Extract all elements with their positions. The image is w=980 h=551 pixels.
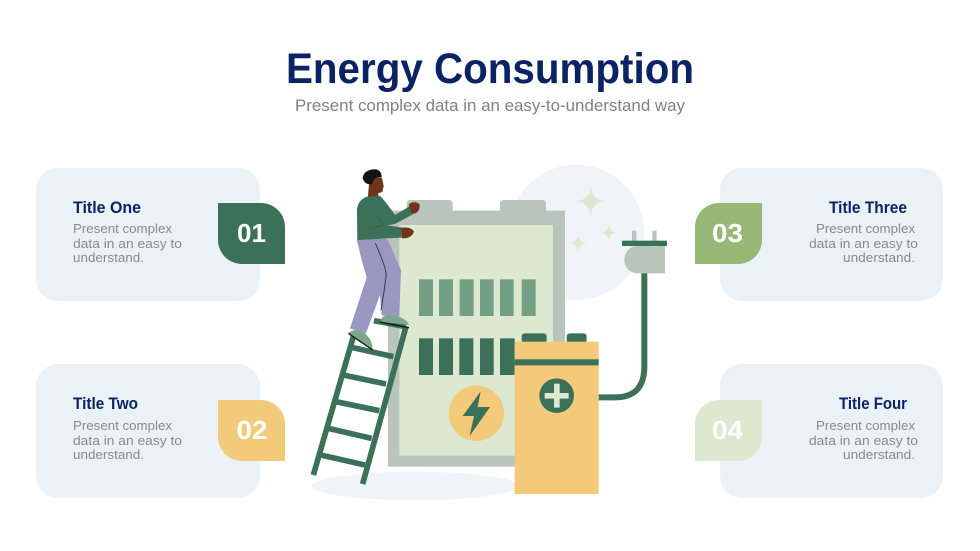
illustration: battery scene <box>312 165 667 500</box>
subtitle: Present complex data in an easy-to-understand way <box>295 96 685 115</box>
hair <box>363 169 382 184</box>
ladder <box>313 321 406 484</box>
plug <box>622 231 667 273</box>
badge 01: 01 <box>237 218 266 248</box>
heading: title four: Title Four <box>839 395 908 413</box>
text block: title one: understand. <box>73 250 144 265</box>
title: Energy Consumption <box>286 45 694 93</box>
charge bars: bottom row <box>419 338 515 375</box>
text block: title four: Present complex <box>816 418 916 433</box>
badge 04: 04 <box>712 415 744 445</box>
panel: title one <box>36 168 285 301</box>
text block: title one <box>73 221 182 265</box>
text block: title two: Present complex <box>73 418 173 433</box>
sweater <box>357 196 413 240</box>
text block: title three: understand. <box>843 250 915 265</box>
shoes <box>381 315 409 325</box>
badge 02: 02 <box>236 415 268 445</box>
text block: title two <box>73 418 182 462</box>
text block: title three: Present complex <box>816 221 916 236</box>
text block: title one: Present complex <box>73 221 173 236</box>
text block: title two: understand. <box>73 447 144 462</box>
text block: title four <box>809 418 918 462</box>
panel: title two <box>36 364 285 498</box>
panel: title three <box>695 168 943 301</box>
heading: title one: Title One <box>73 199 141 217</box>
badge 02 <box>218 400 285 461</box>
large battery <box>388 200 565 467</box>
trousers <box>350 239 401 333</box>
plug cord <box>599 272 644 397</box>
text block: title three: data in an easy to <box>809 236 918 251</box>
badge 03 <box>695 203 762 264</box>
panel: title four <box>695 364 943 498</box>
text block: title one: data in an easy to <box>73 236 182 251</box>
badge 03: 03 <box>712 218 743 248</box>
badge 04 <box>695 400 762 461</box>
person climbing <box>348 169 420 350</box>
badge 01 <box>218 203 285 264</box>
backdrop circle <box>509 165 644 300</box>
icon: lightning bolt <box>449 386 504 441</box>
neck and face <box>368 177 384 200</box>
text block: title three <box>809 221 918 265</box>
icon: plus <box>539 378 574 413</box>
heading: title three: Title Three <box>829 199 907 217</box>
text block: title two: data in an easy to <box>73 433 182 448</box>
hands <box>409 202 420 213</box>
small battery <box>515 333 599 494</box>
heading: title two: Title Two <box>73 395 138 413</box>
ground shadow <box>312 472 518 500</box>
charge bars: top row <box>419 279 536 316</box>
text block: title four: understand. <box>843 447 915 462</box>
text block: title four: data in an easy to <box>809 433 918 448</box>
sparkles <box>570 186 616 253</box>
